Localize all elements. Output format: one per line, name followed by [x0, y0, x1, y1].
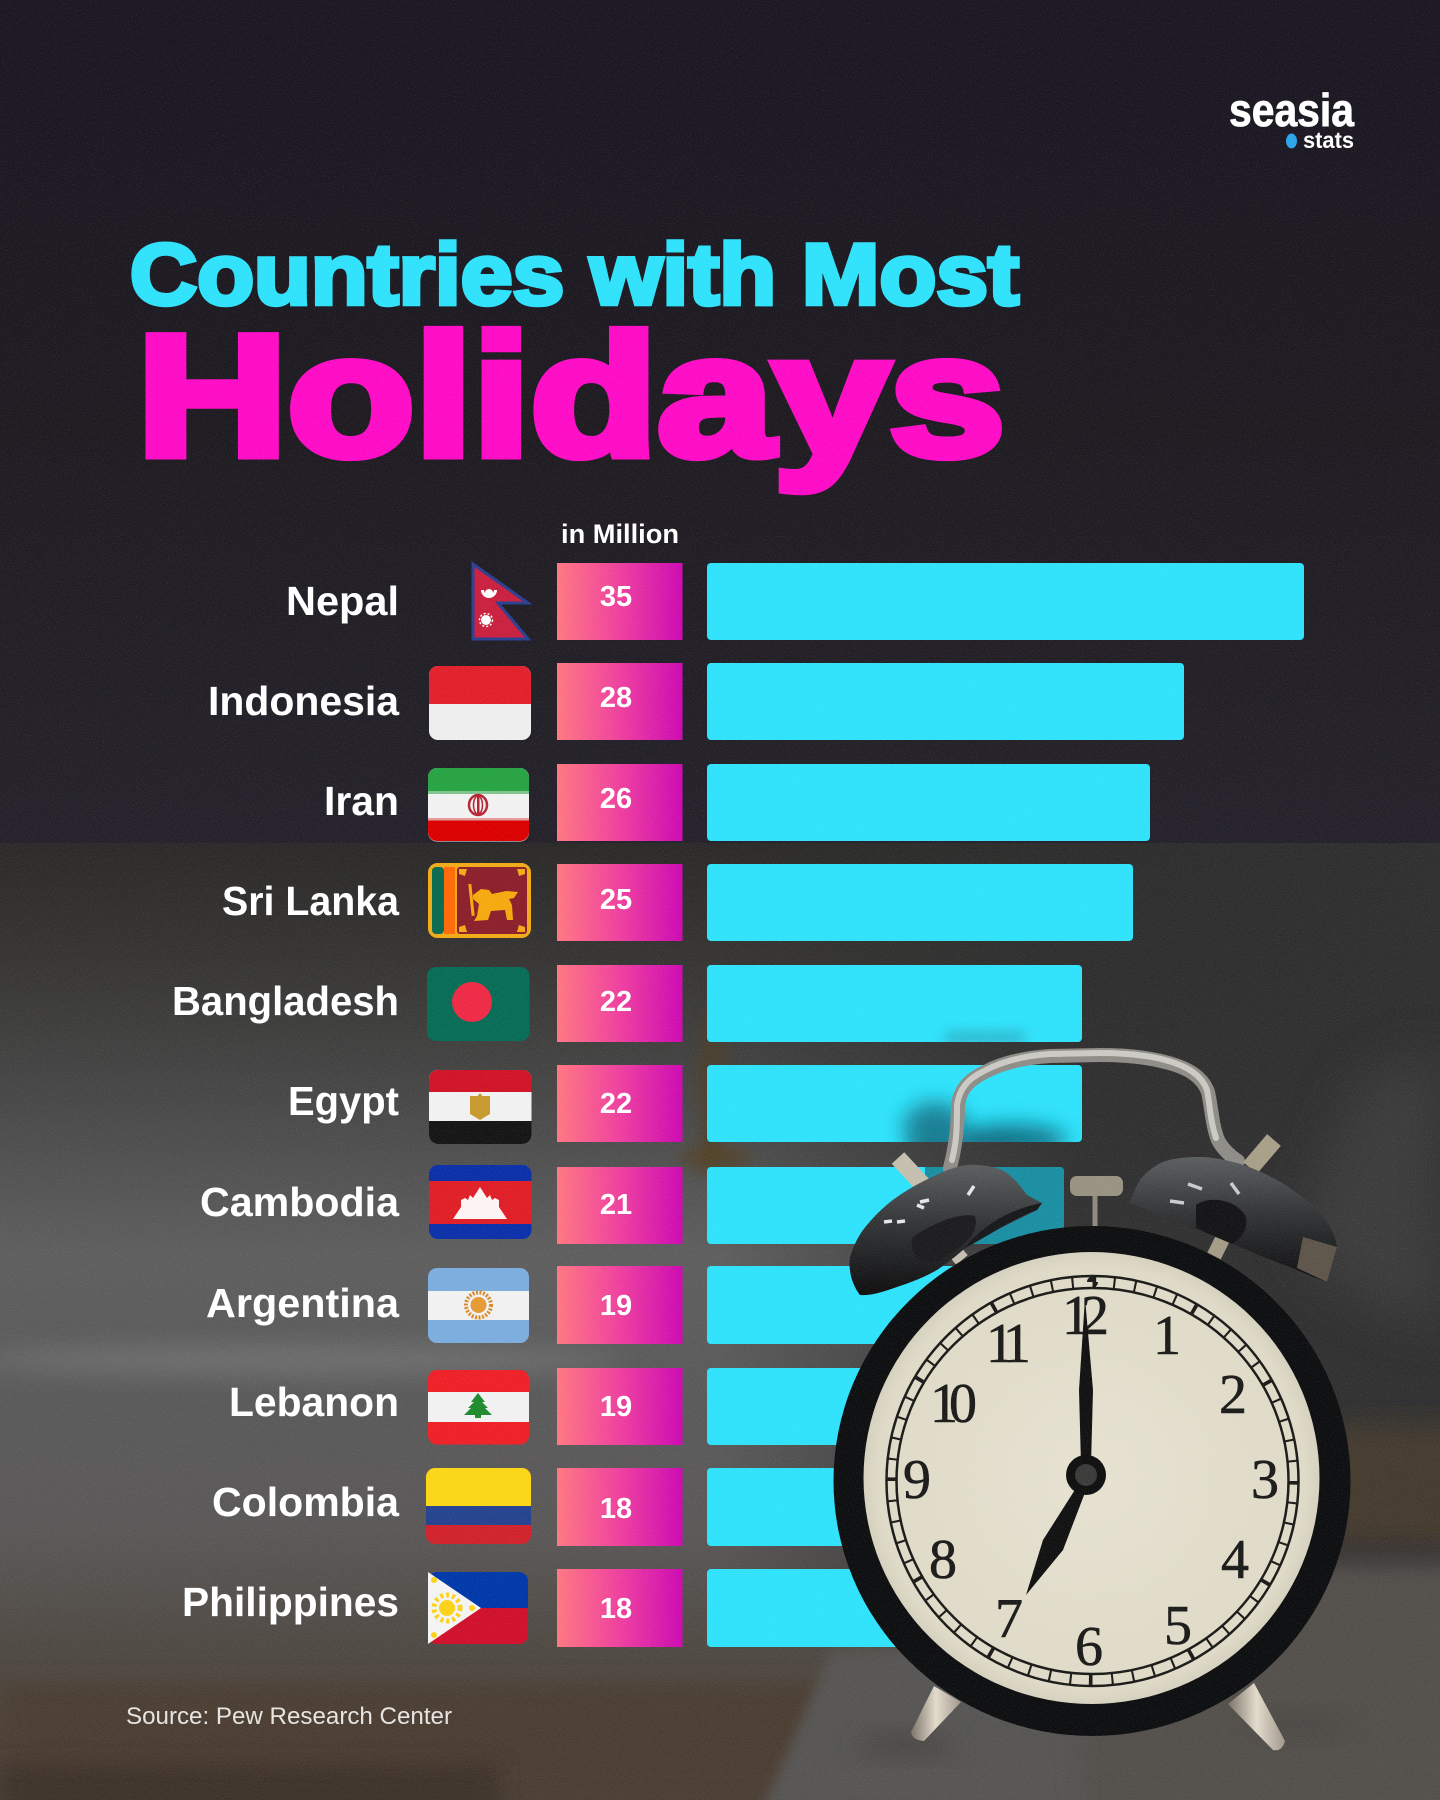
value: 19: 19 [600, 1391, 632, 1423]
row: Philippines [182, 1569, 907, 1647]
row: Cambodia [200, 1165, 1064, 1244]
clock feet [911, 1683, 1285, 1750]
numerals: 3 [1251, 1449, 1279, 1511]
logo: seasia stats [1229, 84, 1354, 153]
value box: 25 [557, 864, 682, 941]
value box: 19 [557, 1266, 682, 1344]
value: 25: 25 [600, 884, 632, 916]
value box: 26 [557, 764, 682, 841]
flag: Sri Lanka [430, 864, 530, 936]
row: Nepal [286, 563, 1304, 640]
numerals: 6 [1075, 1616, 1103, 1678]
row: Egypt [288, 1065, 1082, 1144]
flag: Indonesia [429, 666, 531, 740]
clock shadow on bars [903, 1032, 1067, 1244]
numerals: 7 [995, 1588, 1023, 1650]
label: Indonesia: Indonesia [208, 678, 400, 724]
minute hand [1079, 1298, 1093, 1465]
numerals: 1 [1153, 1305, 1181, 1367]
background: blurred photo lower panel [0, 843, 1440, 1800]
row: Colombia [212, 1468, 907, 1546]
bar: Iran [707, 764, 1150, 841]
bar: Nepal [707, 563, 1304, 640]
flag: Cambodia [429, 1165, 532, 1239]
numerals: 11 [986, 1313, 1028, 1375]
bar: Sri Lanka [707, 864, 1133, 941]
value: 26: 26 [600, 783, 632, 815]
value box: 18 [557, 1569, 682, 1647]
flag: Bangladesh [427, 967, 530, 1041]
hour hand [1026, 1485, 1086, 1595]
value: 22: 22 [600, 986, 632, 1018]
value: 21: 21 [600, 1189, 632, 1221]
bell posts [898, 1140, 1274, 1260]
value: 28: 28 [600, 682, 632, 714]
numerals: 2 [1219, 1364, 1247, 1426]
row: Sri Lanka [222, 864, 1133, 941]
value: 22: 22 [600, 1088, 632, 1120]
label: Cambodia: Cambodia [200, 1179, 400, 1225]
numerals: 9 [903, 1449, 931, 1511]
value box: 19 [557, 1368, 682, 1445]
label: Colombia: Colombia [212, 1479, 400, 1525]
row: Bangladesh [172, 965, 1082, 1042]
label: Sri Lanka: Sri Lanka [222, 878, 400, 924]
unit label: in Million [561, 519, 679, 549]
hub [1066, 1455, 1106, 1495]
bar: Bangladesh [707, 965, 1082, 1042]
value box: 35 [557, 563, 682, 640]
numerals: 4 [1221, 1529, 1249, 1591]
numerals: 8 [929, 1529, 957, 1591]
bar: Argentina [707, 1266, 1007, 1344]
label: Lebanon: Lebanon [229, 1379, 399, 1425]
logo: seasia stats: seasia [1229, 84, 1354, 136]
flag: Philippines [428, 1572, 528, 1644]
value: 18: 18 [600, 1593, 632, 1625]
bar: Egypt [707, 1065, 1082, 1142]
flag: Colombia [426, 1468, 531, 1544]
label: Bangladesh: Bangladesh [172, 978, 399, 1024]
numerals: 5 [1164, 1595, 1192, 1657]
value box: 28 [557, 663, 682, 740]
source note: Source: Pew Research Center [126, 1703, 452, 1730]
numerals: 10 [930, 1373, 975, 1435]
bar: Philippines [707, 1569, 907, 1647]
label: Argentina: Argentina [206, 1280, 400, 1326]
numerals: 12 [1062, 1285, 1106, 1347]
background: dark upper panel [0, 0, 1440, 843]
value: 18: 18 [600, 1493, 632, 1525]
label: Iran: Iran [324, 778, 399, 824]
value box: 22 [557, 1065, 682, 1142]
clock body [834, 1226, 1350, 1736]
clock face [864, 1252, 1320, 1704]
bar: Lebanon [707, 1368, 907, 1445]
left bell [849, 1165, 1042, 1295]
title: Countries with Most: Countries with Most [130, 227, 1019, 323]
flag: Iran [428, 768, 529, 842]
value box: 18 [557, 1468, 682, 1546]
flag: Argentina [428, 1268, 529, 1343]
value box: 22 [557, 965, 682, 1042]
label: Philippines: Philippines [182, 1579, 399, 1625]
row: Argentina [206, 1266, 1007, 1344]
right bell [1130, 1157, 1337, 1282]
label: Egypt: Egypt [288, 1078, 399, 1124]
logo: seasia stats: stats [1303, 127, 1354, 153]
chart: holiday bars [172, 563, 1304, 1647]
value: 19: 19 [600, 1290, 632, 1322]
clock handle [950, 1053, 1238, 1168]
title: Holidays: Holidays [137, 300, 1005, 492]
minute track [886, 1276, 1298, 1686]
illustration: alarm clock [834, 1053, 1350, 1750]
row: Iran [324, 764, 1150, 842]
bar: Indonesia [707, 663, 1184, 740]
bar: Colombia [707, 1468, 907, 1546]
label: Nepal: Nepal [286, 578, 399, 624]
value: 35: 35 [600, 581, 632, 613]
flag: Nepal [473, 564, 528, 639]
value box: 21 [557, 1167, 682, 1244]
row: Lebanon [229, 1368, 907, 1445]
row: Indonesia [208, 663, 1184, 740]
bar: Cambodia [707, 1167, 1064, 1244]
numerals [903, 1285, 1279, 1678]
flag: Egypt [429, 1070, 532, 1144]
flag: Lebanon [428, 1370, 529, 1444]
